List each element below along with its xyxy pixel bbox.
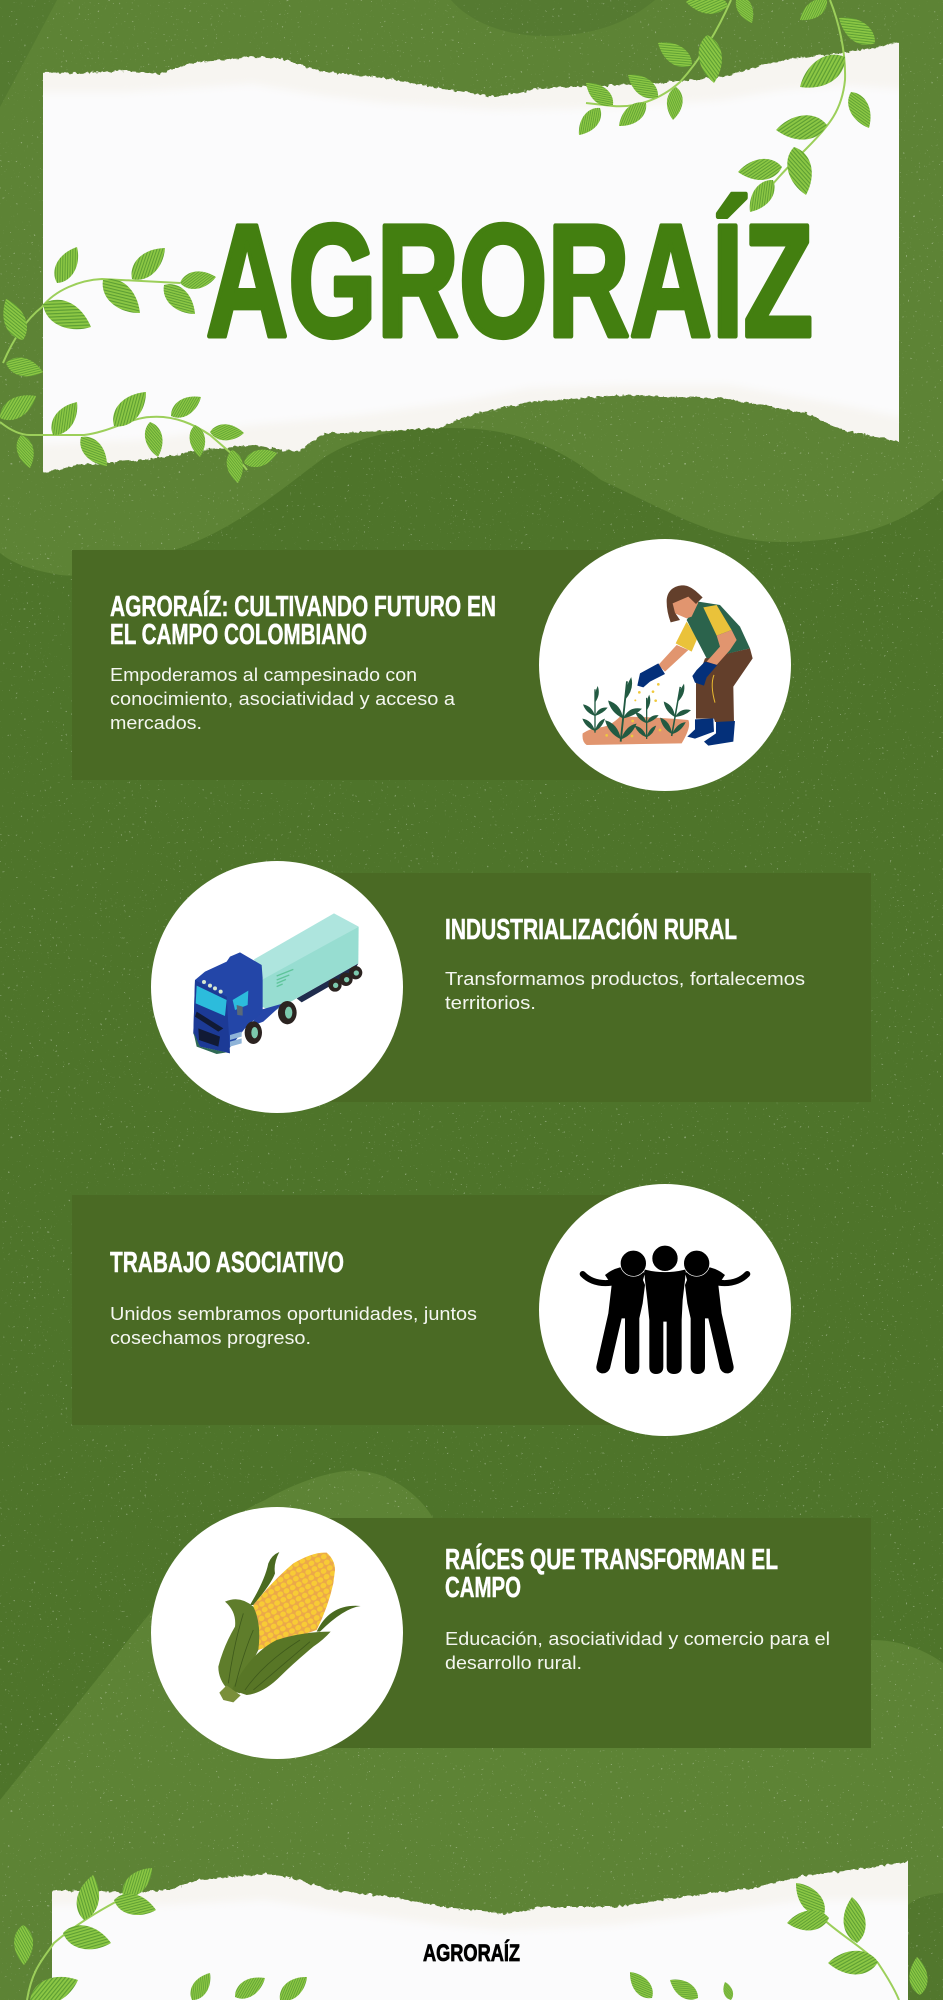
icon: three people embracing [583,1245,747,1374]
heading: panel 1: AGRORAÍZ: CULTIVANDO FUTURO EN [110,589,496,623]
vine: lower left [0,384,279,484]
panel: Industrialización rural [151,861,871,1113]
panel: Trabajo asociativo [72,1184,791,1436]
text: panel 1: Empoderamos al campesinado con [110,664,417,685]
text: panel 1: conocimiento, asociatividad y acceso a [110,688,456,709]
panel: Agroraíz cultivando futuro [72,539,791,791]
torn paper: footer [40,1860,920,2000]
vine: left [0,240,217,381]
circle: panel 4 [151,1507,403,1759]
vine: footer center [186,1967,735,2000]
icon: farmer planting [582,585,753,746]
heading: panel 4 [445,1542,778,1604]
text: panel 3: Unidos sembramos oportunidades, juntos [110,1303,477,1324]
text: panel 1 [110,664,456,733]
vine: footer left [14,1861,159,2000]
vine: top center [573,0,759,140]
text: panel 3: cosechamos progreso. [110,1327,311,1348]
torn paper: header [30,40,915,476]
circle: panel 1 [539,539,791,791]
heading: panel 1 [110,589,496,651]
footer title: AGRORAÍZ [423,1939,520,1967]
vine: top right [737,0,881,218]
panel: Raíces que transforman el campo [151,1507,871,1759]
vine: footer right [786,1876,929,2000]
icon: truck [193,913,362,1054]
text: panel 2 [445,968,805,1013]
text: panel 4: Educación, asociatividad y comercio para el [445,1628,830,1649]
heading: panel 3: TRABAJO ASOCIATIVO [110,1247,344,1279]
text: panel 4 [445,1628,830,1673]
text: panel 2: Transformamos productos, fortalecemos [445,968,805,989]
heading: panel 4: RAÍCES QUE TRANSFORMAN EL [445,1542,778,1576]
heading: panel 2: INDUSTRIALIZACIÓN RURAL [445,912,737,946]
circle: panel 3 [539,1184,791,1436]
text: panel 1: mercados. [110,712,202,733]
heading: panel 4: CAMPO [445,1572,521,1604]
circle: panel 2 [151,861,403,1113]
text: panel 2: territorios. [445,992,536,1013]
icon: corn cob [218,1552,361,1702]
heading: panel 1: EL CAMPO COLOMBIANO [110,619,367,651]
text: panel 4: desarrollo rural. [445,1652,582,1673]
text: panel 3 [110,1303,477,1348]
